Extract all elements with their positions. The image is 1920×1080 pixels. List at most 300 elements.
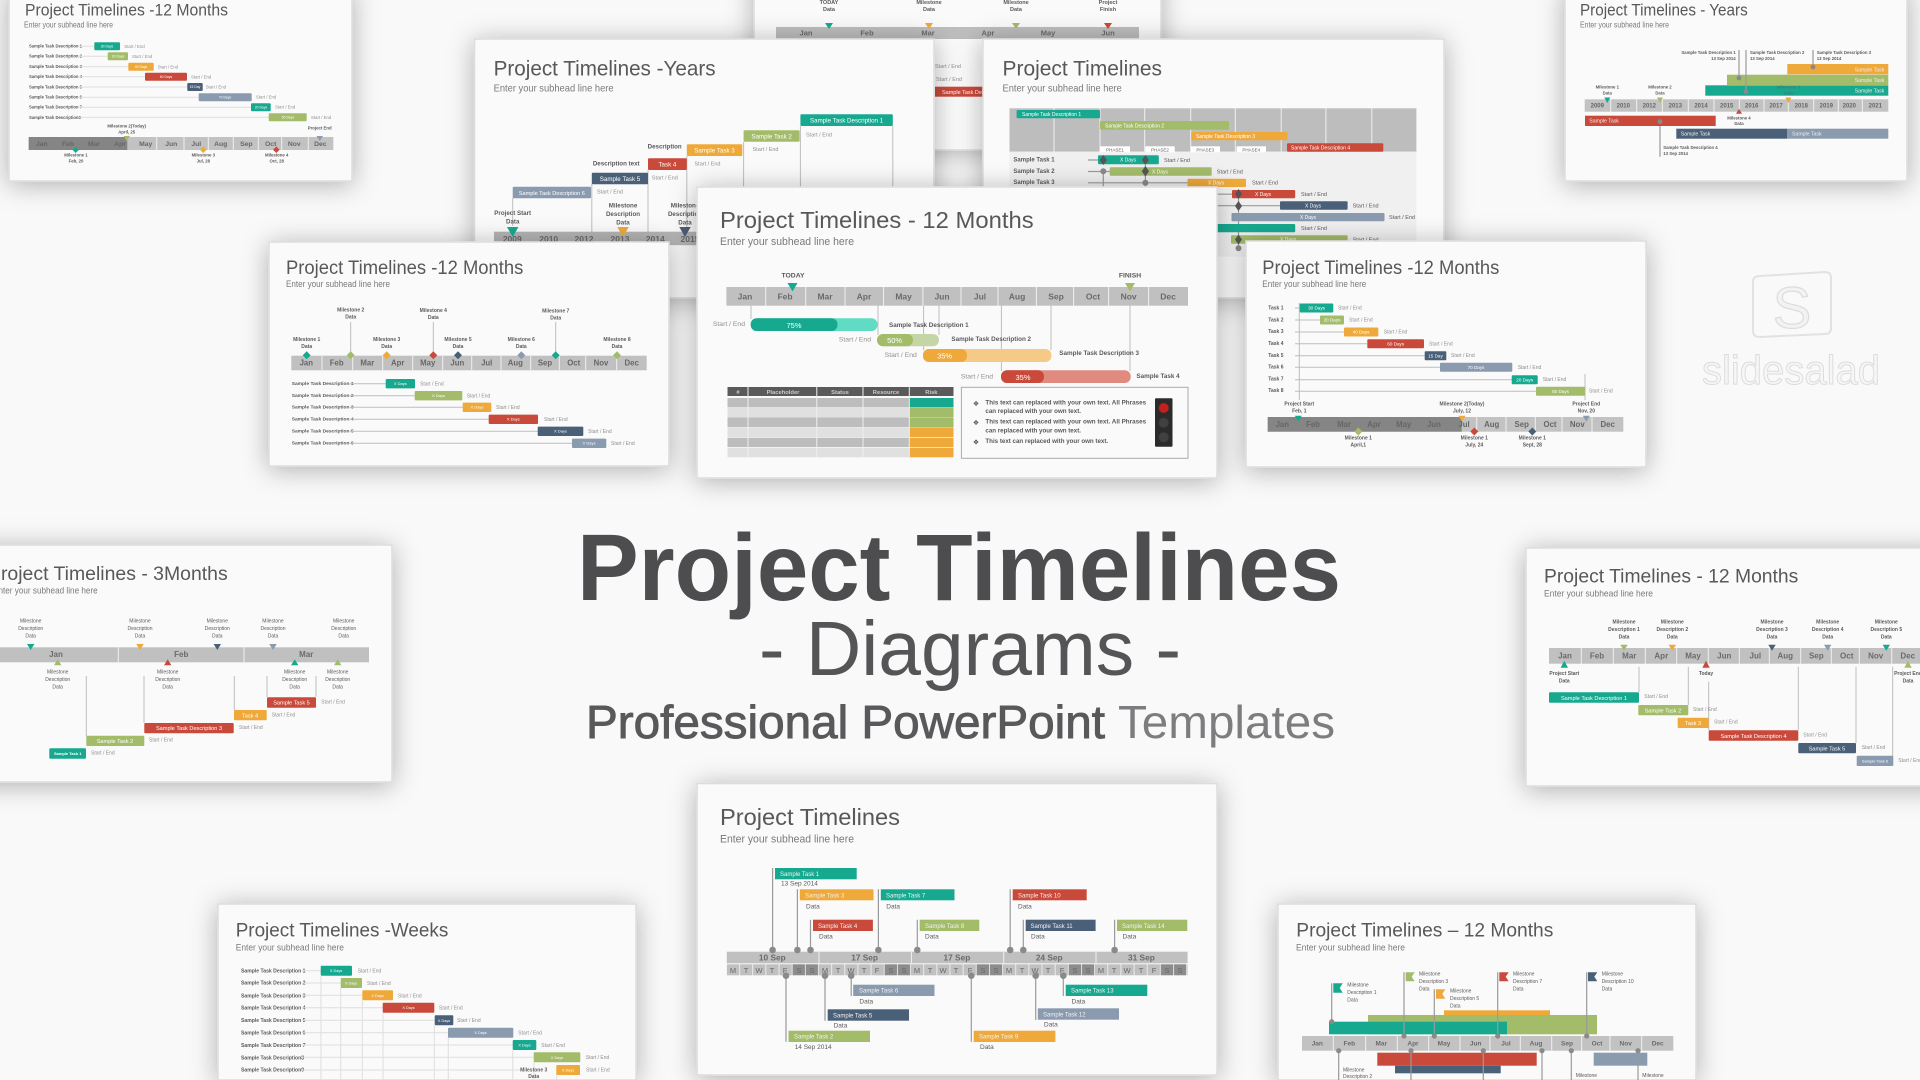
milestone labels above band: Data [1619,634,1630,640]
milestone label [520,1068,548,1080]
month labels: Dec [625,358,640,368]
year band [1585,99,1888,112]
start end notes: Start / End [191,74,212,79]
bar labels: 20 Days [112,54,125,58]
panel: 3 months slide [0,545,392,782]
milestone labels: Milestone 4 [1727,116,1751,121]
milestone labels: Milestone 3 [1777,84,1801,89]
stacked bar labels: Sample Task [1855,78,1885,84]
milestone stems [351,322,556,352]
row guide lines [1088,160,1280,250]
bar label: Sample Task Description [942,90,1002,96]
month labels: Jan [1558,652,1572,660]
phase bar labels: Sample Task Description 2 [1105,123,1164,129]
start end notes: Start / End [541,1043,565,1049]
milestone labels: Finish [1100,7,1117,13]
month labels: Mar [299,650,313,659]
start end notes: Start / End [586,1068,610,1074]
bar labels: X Days [1255,192,1272,198]
row labels [1013,158,1055,186]
milestone labels: Description 3 [1419,979,1448,985]
bar labels: X Days [562,1068,574,1072]
task bars [386,379,606,448]
milestone labels above band: Description 4 [1812,627,1844,633]
timeline labels [1284,402,1600,449]
task labels: Sample Task Description 2 [241,981,306,987]
panel: top left 12 months slide [9,0,352,181]
phase bar labels: Sample Task Description 1 [1022,112,1081,118]
phase tag labels: PHASE2 [1151,147,1169,152]
bar labels: X Days [507,417,520,422]
day labels: MTWTFSSMTWTFSSMTWTFSSMTWTFSSMTWTFSS [730,966,1183,975]
guide lines [1639,667,1893,756]
title: Project Timelines – 12 Months [1296,921,1553,942]
month labels: Mar [1376,1040,1388,1048]
task guide lines [350,384,572,443]
start end notes [358,968,610,1074]
month labels: May [1685,652,1701,660]
milestone labels above band [18,618,356,639]
task labels: Sample Task Description 2 [951,336,1032,343]
bar labels: X Days [554,429,567,434]
bar labels: 20 Days [255,106,268,110]
month labels: Feb [174,650,189,659]
task bars [49,697,316,759]
milestone labels: Data [1784,90,1794,95]
table: Placeholder [767,390,800,396]
milestone labels above band: Milestone [1612,619,1636,625]
markers [1604,98,1791,114]
title: Project Timelines -12 Months [25,2,228,20]
bar labels: X Days [345,982,357,986]
bar labels: X Days [1152,169,1169,175]
month labels: Dec [1601,420,1616,429]
date and data notes: Data [886,903,900,910]
milestone labels: Milestone 6 [508,337,535,343]
task labels: Sample Task Description 6 [292,440,354,446]
stair bar labels: Sample Task 2 [751,134,792,140]
task labels: Sample Task Description 1 [241,968,306,974]
start end notes: Start / End [1518,365,1542,371]
milestone labels: Milestone 3 [373,337,401,343]
bar labels: 20 Days [1324,318,1341,323]
start end notes: Start / End [1164,158,1190,164]
month labels: Feb [330,358,344,368]
guide lines [79,46,269,117]
date and data notes: Data [980,1044,994,1051]
milestone labels above band: Data [25,633,36,639]
milestone labels below band: Data [162,684,173,690]
start end notes: Start / End [1589,388,1613,394]
year labels: 2014 [1694,104,1708,110]
milestone labels: Data [506,219,520,226]
panel: weeks slide [218,904,636,1080]
start end notes: Start / End [1862,745,1886,751]
table [728,387,954,457]
timeline labels: July, 24 [1465,443,1484,449]
start end notes: Start / End [1349,318,1373,324]
guide lines [86,676,316,736]
milestone labels above band: Milestone [1661,619,1684,625]
year labels: 2013 [611,234,630,244]
milestone labels: Data [923,7,936,13]
task labels: Sample Task 4 [1136,373,1180,380]
stair bar labels: Sample Task 3 [694,148,735,154]
start end notes: Start / End [885,352,917,359]
month labels: Feb [1590,652,1604,660]
task labels: Sample Task Description 3 [29,64,83,69]
date and data notes: Data [925,934,939,941]
month labels: Oct [1840,652,1854,660]
milestone labels: Description [668,211,702,218]
year labels [503,234,700,244]
milestone label: Data [528,1074,539,1080]
start end notes: Start / End [694,162,720,168]
stair bar labels: Sample Task 5 [600,176,641,183]
start end notes: Start / End [961,374,993,381]
phase tag labels: PHASE1 [1106,147,1124,152]
bar labels: X Days [438,1019,450,1023]
start end notes: Start / End [158,64,179,69]
timeline labels: Milestone 1 [1461,436,1488,442]
task labels: Sample Task Description 4 [29,74,83,79]
percent labels [786,321,1031,382]
start end notes: Start / End [420,382,444,388]
milestone labels above band: Milestone [1760,619,1784,625]
year labels: 2012 [575,234,594,244]
month labels: Aug [1530,1040,1542,1048]
bars above band [1329,1010,1597,1034]
text box with bullets: This text can replaced with your own text. [985,438,1108,445]
milestone labels below band: Data [332,684,343,690]
month labels: Apr [1407,1040,1419,1048]
month labels: Sep [538,358,552,368]
milestone labels above band: Description 5 [1870,627,1902,633]
month labels: Oct [1544,420,1557,429]
milestone labels: Milestone [1419,972,1441,978]
bar labels: X Days [432,393,445,398]
week band [727,952,1188,963]
milestone labels: Milestone 5 [444,337,472,343]
task bar labels: Sample Task 4 [818,924,858,930]
milestone labels below band: Project Start [1549,671,1579,677]
bar labels: 15 Day [1428,353,1443,358]
gantt bars [1098,155,1384,244]
bar labels: 15 Day [190,85,201,89]
panel: main 12 months slide [697,187,1217,478]
date and data notes: Data [834,1022,848,1029]
percent labels: 50% [887,336,902,345]
text box with bullets: ❖ [973,400,979,408]
bar labels [1120,158,1322,243]
year labels: 2020 [1843,104,1857,110]
month labels: Dec [1160,291,1176,301]
date and data notes: 13 Sep 2014 [781,880,818,887]
start end notes: Start / End [1644,694,1668,700]
start end notes: Start / End [398,993,422,999]
row labels: Sample Task 1 [1013,158,1055,164]
bar labels: 30 Days [101,44,114,48]
milestone labels: Data [1513,987,1524,993]
month labels [738,291,1176,301]
year band [494,232,934,245]
task labels [292,381,354,446]
start end notes: Start / End [839,337,871,344]
timeline labels: Milestone 1 [1345,436,1372,442]
flag stems and dots [1329,972,1641,1080]
start end notes: Start / End [124,44,145,49]
start end notes [1644,694,1920,764]
diamonds and dots [1100,155,1242,251]
month labels: May [139,141,153,148]
milestone labels above band: Data [212,633,223,639]
subhead: Enter your subhead line here [1544,589,1653,600]
task labels: Sample Task Description 1 [29,44,83,49]
guide lines [302,971,557,1080]
bar labels [394,381,595,446]
milestone labels above band: Milestone [20,618,42,624]
timeline labels: Project End [308,126,332,131]
today and finish markers [788,283,1135,292]
bar labels: 70 Days [1468,365,1485,370]
bar labels: X Days [551,1056,563,1060]
month labels: Feb [860,28,874,38]
month labels: Nov [594,358,609,368]
month band [726,287,1188,306]
month labels: Apr [1367,420,1381,429]
month labels: Aug [1778,652,1793,660]
milestone labels above band: Data [1667,634,1678,640]
milestone labels above band: Data [135,633,145,639]
start end notes: Start / End [518,1030,542,1036]
task labels: Sample Task Description 5 [29,84,83,89]
milestone labels: Milestone [1343,1068,1365,1074]
start end notes: Start / End [206,84,227,90]
milestone labels below band: Description [155,677,180,683]
month labels: Jul [1750,652,1761,660]
month labels: Oct [1086,291,1100,301]
bar labels [1308,306,1570,394]
task bar labels: Sample Task 6 [859,989,899,995]
markers [1295,416,1590,436]
description labels: Sample Task Description 3 [1817,50,1872,55]
bar labels: X Days [518,1044,531,1048]
start end notes: Start / End [311,115,332,120]
task labels: Sample Task Description 6 [241,1031,306,1037]
month labels: Aug [1484,420,1500,429]
month labels: May [1041,28,1056,38]
task labels [29,44,83,120]
milestone labels above band: Data [1767,634,1778,640]
start end notes: Start / End [1301,226,1327,232]
bar labels: Sample Task Description 1 [1561,696,1627,702]
month labels: Jan [1276,420,1289,429]
description labels: Sample Task Description 1 [1681,50,1736,55]
month labels [49,650,313,659]
date and data notes: Data [1122,934,1137,941]
bar labels: Task 3 [1685,721,1701,727]
task labels: Sample Task Description 5 [241,1018,306,1024]
milestone labels: Milestone [609,203,638,210]
subhead: Enter your subhead line here [24,20,113,29]
row labels: Sample Task 2 [1013,169,1055,175]
year labels: 2013 [1669,104,1683,110]
timeline labels: Milestone 2(Today) [1440,402,1485,408]
timeline labels: Milestone 1 [1519,436,1546,442]
task labels: Task 3 [1268,329,1284,335]
bar labels: X Days [371,994,384,998]
stair bar labels: Task 4 [658,162,677,168]
start end notes: Start / End [467,394,491,400]
year labels: 2021 [1869,104,1883,110]
month labels: Aug [214,141,227,148]
milestone diamonds [303,351,621,359]
subhead: Enter your subhead line here [1580,20,1669,29]
milestone labels below band: Today [1699,671,1713,677]
start end notes: Start / End [367,981,391,987]
month labels: Sep [240,141,253,148]
timeline labels: April,1 [1351,443,1366,449]
start end notes [91,699,345,756]
task labels: Sample Task Description 1 [292,381,354,387]
timeline labels: Milestone 2(Today) [107,124,147,129]
milestone labels above band: Data [338,633,349,639]
milestone labels: Milestone 4 [420,308,447,314]
icon: slidesalad logo [1753,272,1831,341]
bar labels: X Days [330,969,342,973]
milestone labels below band: Description [45,677,70,683]
month band [1302,1036,1673,1051]
date and data notes: Data [806,903,820,910]
bar labels: X Days [1300,215,1317,221]
subhead: Enter your subhead line here [1262,279,1366,289]
month labels: Oct [1592,1040,1603,1048]
task bars [1549,692,1893,766]
guide lines [1295,303,1585,400]
description labels: Description [648,143,682,150]
phase bar labels: Sample Task Description 3 [1196,134,1255,140]
milestone labels below band: Description [325,677,350,683]
milestone labels [1596,84,1801,126]
year labels [1591,104,1883,110]
year labels: 2009 [1591,104,1605,110]
start end notes: Start / End [652,176,678,182]
bar labels: X Days [394,381,407,386]
panel: left 12 months slide [269,242,669,466]
month labels: Apr [1654,652,1668,660]
milestone labels above band: Description 2 [1656,627,1688,633]
start end notes: Start / End [544,417,568,423]
start end notes: Start / End [752,147,778,153]
title: Project Timelines - 12 Months [1544,566,1799,588]
lower bar labels: Sample Task [1589,119,1619,125]
start end notes: Start / End [1353,238,1379,244]
task bar labels: Sample Task 7 [886,893,926,899]
month labels: Nov [1868,652,1884,660]
phase tag labels: PHASE3 [1196,147,1215,152]
month labels: Mar [360,358,374,368]
bar labels: 20 Days [1516,377,1534,382]
stems [773,868,1115,1042]
table: # [736,390,740,396]
milestone labels: Milestone [1602,972,1623,978]
month labels: Dec [1652,1040,1664,1048]
bar labels: Sample Task Description 3 [156,726,222,732]
year labels: 2009 [503,234,522,244]
milestone labels: Data [301,344,312,350]
task labels [1268,306,1284,394]
month band [776,27,1139,39]
milestone labels: Data [1010,7,1023,13]
month band [1268,417,1623,432]
stair task bars [513,114,893,198]
row labels: Sample Task 3 [1013,180,1055,186]
month labels: Jun [165,141,177,148]
start end notes: Start / End [272,712,296,718]
milestone labels above band: Description 1 [1608,627,1640,633]
timeline labels: Feb, 1 [1292,409,1307,415]
milestone labels above band: Milestone [207,618,228,624]
month band [291,356,647,370]
milestone labels below band: Milestone [157,669,179,675]
subtitle: Professional PowerPoint Templates [586,696,1335,748]
title: Project Timelines [720,804,900,830]
start end notes: Start / End [1451,353,1475,359]
task labels: Task 8 [1268,388,1284,394]
milestone labels above band: Milestone [333,618,355,624]
month labels: May [1438,1040,1451,1048]
description labels: Sample Task Description 2 [1750,50,1805,55]
title: Project Timelines -12 Months [286,258,523,279]
milestone labels: Description 2 [1343,1074,1372,1080]
month band [29,137,333,150]
stair lines [513,126,893,256]
year labels: 2018 [1795,104,1809,110]
phase tag labels [1106,147,1261,152]
start end notes: Start / End [358,968,382,974]
milestone labels [494,203,702,226]
bar labels: X Days [474,1031,487,1035]
milestone labels below band: Milestone [284,669,306,675]
week labels: 17 Sep [851,952,878,962]
month band [1549,648,1920,664]
percent labels: 35% [1015,373,1031,382]
red task bar [935,87,995,97]
milestone label: Milestone 3 [520,1068,548,1074]
start end notes: Start / End [1543,377,1567,383]
month labels [800,28,1115,38]
month labels: Feb [62,141,74,148]
start end notes: Start / End [256,95,277,100]
icon: milestone flags [1333,972,1597,999]
stacked bars [1705,64,1888,96]
start end notes: Start / End [1252,180,1278,186]
phase tags [1100,146,1266,152]
month labels: Apr [857,291,872,301]
month labels: Jul [191,141,201,148]
bar labels: 40 Days [135,65,148,69]
subhead: Enter your subhead line here [236,943,344,953]
task labels [241,968,306,1074]
month labels: Jun [1717,652,1732,660]
text box with bullets: This text can replaced with your own text. All Phrases [985,419,1147,426]
table: Status [831,390,849,396]
markers [72,136,323,153]
milestone labels above band [1608,619,1902,640]
bar labels: 60 Days [1387,341,1405,346]
task bar labels: Sample Task 3 [805,893,845,899]
month labels: Sep [1048,291,1064,301]
